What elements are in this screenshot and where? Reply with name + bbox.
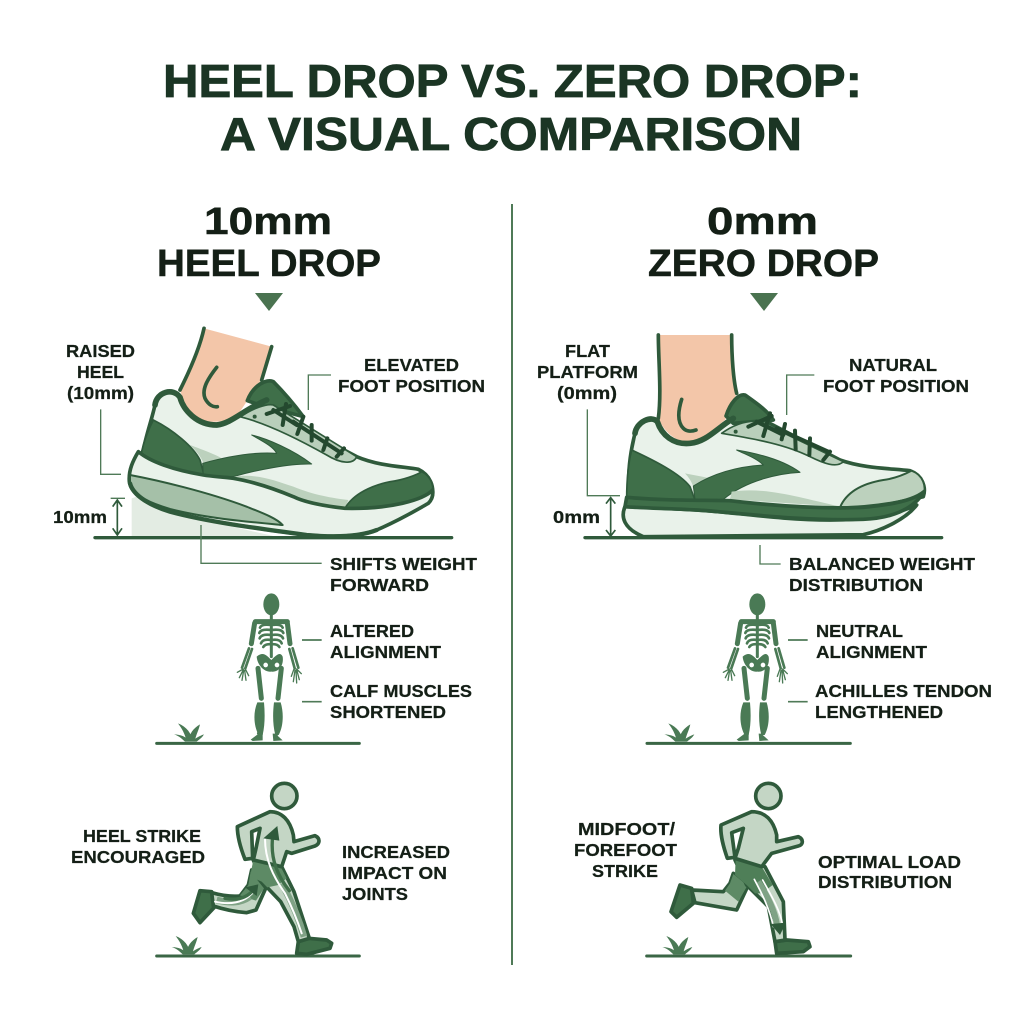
right shoe labels (537, 341, 975, 595)
title: HEEL DROP VS. ZERO DROP: (163, 55, 862, 107)
shorts (735, 858, 773, 893)
shorts (250, 860, 287, 887)
heading: 0mm zero drop (648, 201, 879, 285)
shoe upper (629, 417, 924, 510)
head (272, 783, 297, 809)
skeleton (237, 593, 301, 735)
right shoe labels: PLATFORM (537, 362, 638, 382)
icon: grass (664, 723, 694, 742)
front leg (735, 860, 785, 942)
foot (658, 335, 737, 443)
ground line (647, 951, 851, 960)
tongue (247, 381, 303, 417)
heel counter (140, 420, 204, 475)
shade stripe (217, 883, 304, 937)
left skeleton labels: ALIGNMENT (330, 642, 441, 662)
icon: thigh arrow (245, 884, 258, 896)
collar (635, 418, 733, 444)
left shoe labels: SHIFTS WEIGHT (330, 554, 477, 574)
heading: 10mm heel drop: 10mm (204, 201, 332, 243)
right skeleton labels: ACHILLES TENDON (815, 681, 992, 701)
heading: 10mm heel drop: HEEL DROP (157, 243, 381, 285)
torso and arm (237, 812, 319, 867)
right shoe labels: (0mm) (557, 383, 617, 403)
icon: grass (172, 936, 202, 954)
back thigh shade (240, 872, 264, 901)
sole (623, 505, 917, 537)
icon: down arrow (771, 923, 786, 935)
midsole (129, 452, 433, 536)
right runner labels: OPTIMAL LOAD (818, 852, 961, 872)
shoe upper (133, 392, 433, 530)
right skeleton labels: LENGTHENED (815, 702, 943, 722)
eyestay (722, 421, 843, 465)
right runner (647, 783, 851, 956)
left skeleton figure (157, 593, 359, 743)
eyelet (734, 430, 738, 434)
left shoe labels: RAISED (66, 341, 135, 361)
right shoe labels: FOOT POSITION (823, 376, 969, 396)
right runner labels: STRIKE (592, 861, 658, 881)
dark flow lines (225, 837, 289, 899)
torso and arm (721, 812, 802, 867)
lower band (233, 476, 348, 508)
front leg (253, 860, 309, 942)
shade stripe (758, 882, 777, 927)
icon: grass (662, 936, 692, 954)
calf bones (254, 702, 283, 735)
icon: 0mm measure arrow (606, 498, 615, 536)
outsole edge (130, 483, 377, 536)
left runner labels: IMPACT ON (342, 863, 447, 883)
pelvis (743, 654, 769, 672)
right shoe labels: FLAT (565, 341, 610, 361)
icon: 10mm measure arrow (113, 500, 122, 535)
left shoe leaders and measure (101, 375, 331, 563)
left shoe labels: ELEVATED (364, 355, 459, 375)
back shoe (193, 891, 215, 923)
right runner labels: MIDFOOT/ (578, 819, 675, 839)
left shoe labels: FOOT POSITION (338, 376, 485, 396)
feet (737, 734, 769, 741)
eyestay (240, 405, 357, 462)
side stripe (203, 435, 312, 477)
leader lines (302, 640, 322, 702)
sole wedge (130, 475, 283, 525)
left skeleton labels: SHORTENED (330, 702, 446, 722)
lower band (730, 490, 840, 507)
leader lines (788, 640, 808, 702)
foot outline (180, 328, 272, 407)
ground line (157, 739, 359, 748)
right runner labels: DISTRIBUTION (818, 872, 952, 892)
left shoe labels (53, 341, 485, 595)
right shoe illustration (585, 335, 942, 538)
ground line (95, 533, 452, 543)
icon: left down triangle (255, 293, 283, 311)
right skeleton labels: ALIGNMENT (816, 642, 927, 662)
left skeleton labels: ALTERED (330, 621, 414, 641)
icon: grass (174, 723, 204, 742)
tongue (726, 395, 773, 423)
heading: 0mm zero drop: 0mm (707, 201, 818, 243)
left runner labels (71, 826, 450, 904)
ground line (585, 533, 942, 543)
pelvis gaps (749, 663, 754, 667)
left runner labels: ENCOURAGED (71, 847, 205, 867)
heading: 10mm heel drop (157, 201, 381, 285)
laces (748, 413, 830, 460)
eyelet (253, 415, 257, 419)
ground line (157, 951, 359, 960)
foot (180, 328, 272, 422)
light strip (190, 445, 222, 463)
white flow lines (215, 838, 302, 933)
foot outline (658, 335, 737, 431)
skeleton (723, 593, 787, 698)
toe cap (840, 471, 925, 507)
left shoe labels: (10mm) (67, 383, 134, 403)
pelvis (257, 654, 283, 672)
front shoe (297, 938, 332, 954)
right shoe labels: DISTRIBUTION (789, 575, 923, 595)
title: A VISUAL COMPARISON (220, 108, 802, 160)
icon: up arrow (263, 826, 279, 841)
right skeleton labels (815, 621, 992, 722)
left shoe labels: 10mm (53, 507, 107, 527)
right shoe leaders and measure (587, 375, 814, 564)
feet (251, 734, 283, 741)
left runner labels: HEEL STRIKE (83, 826, 201, 846)
left shoe illustration (95, 328, 452, 538)
left skeleton labels (330, 621, 472, 722)
front shoe (775, 940, 810, 953)
back leg (692, 873, 748, 910)
toe cap (345, 472, 433, 508)
right skeleton labels: NEUTRAL (816, 621, 903, 641)
side stripe (693, 450, 800, 499)
right shoe labels: NATURAL (849, 355, 937, 375)
left shoe labels: FORWARD (330, 575, 429, 595)
right shoe labels: BALANCED WEIGHT (789, 554, 975, 574)
heading: 0mm zero drop: ZERO DROP (648, 243, 879, 285)
head (756, 783, 781, 809)
right runner labels (574, 819, 961, 892)
right skeleton figure (647, 593, 850, 743)
collar (155, 392, 267, 425)
left runner labels: INCREASED (342, 842, 450, 862)
back thigh shorts (725, 874, 747, 902)
title (163, 55, 862, 160)
heel wedge (132, 497, 273, 536)
center divider (511, 204, 513, 965)
heel counter (627, 450, 695, 500)
left skeleton labels: CALF MUSCLES (330, 681, 472, 701)
right shoe labels: 0mm (553, 507, 600, 527)
laces (267, 404, 344, 457)
right runner labels: FOREFOOT (574, 840, 677, 860)
back leg (212, 870, 266, 913)
back shoe (671, 885, 693, 917)
left runner (157, 783, 359, 956)
ground line (647, 739, 850, 748)
white flow lines (754, 879, 783, 927)
pelvis gaps (263, 663, 268, 667)
left shoe labels: HEEL (77, 362, 124, 382)
calf bones (740, 702, 769, 735)
icon: right down triangle (750, 293, 778, 311)
light strip (685, 473, 710, 487)
midsole band (625, 492, 924, 520)
left runner labels: JOINTS (342, 884, 408, 904)
